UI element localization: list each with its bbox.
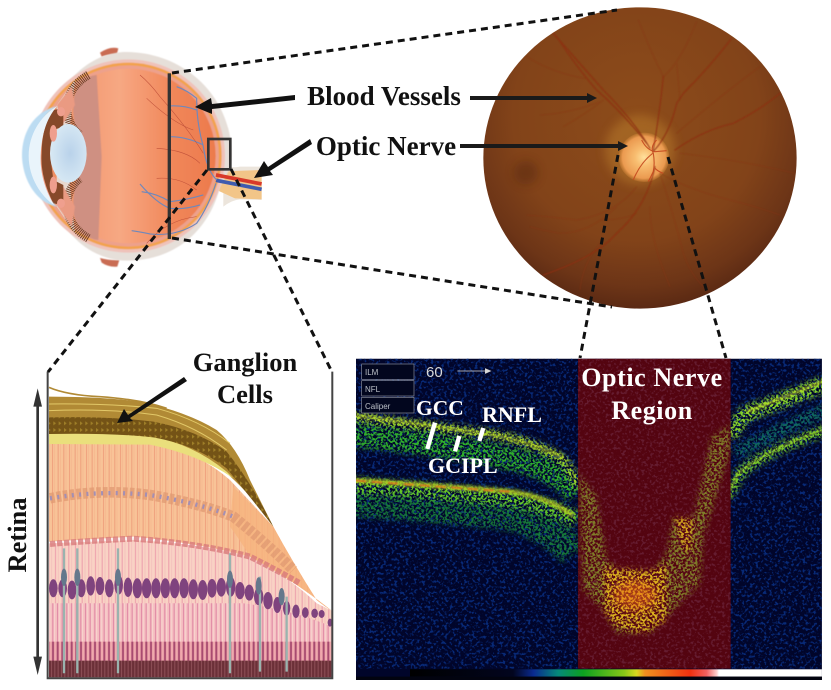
fundus photograph: [483, 7, 797, 309]
button labels: Caliper: [365, 402, 391, 411]
sclera: [53, 52, 232, 261]
scale bar: [410, 669, 822, 677]
scale arrow: [457, 369, 491, 373]
RPE green: [350, 485, 577, 520]
label: GCIPL: GCIPL: [428, 453, 498, 478]
pointer arrows: [117, 93, 628, 423]
cilliary fibres: [67, 75, 88, 238]
arrow to fundus blood vessels: [470, 93, 597, 103]
macula: [514, 161, 538, 185]
retina cross-section panel: [33, 372, 332, 678]
magnification box: [208, 139, 230, 169]
optic nerve core: [217, 170, 262, 199]
background speckle: [356, 359, 822, 669]
main vessels: [543, 33, 780, 275]
fundus disc: [483, 7, 797, 309]
label: ganglion cells: Cells: [217, 379, 273, 409]
retina height arrow: [33, 388, 42, 675]
white gap in front of vitreous: [57, 80, 75, 233]
optic disc glow: [605, 115, 675, 185]
aqueous chamber: [29, 106, 57, 205]
lower pink layer: [49, 603, 332, 677]
scan legend tick marks: [427, 423, 483, 451]
label: 60: 60: [426, 364, 443, 381]
OCT scan panel: [350, 359, 827, 680]
optic cup hot core: [613, 580, 657, 610]
right upper band: [731, 383, 827, 437]
peach bipolar layer: [49, 440, 332, 611]
ganglion fibre layer: [49, 397, 273, 527]
button labels: ILM: [365, 368, 379, 377]
right haze: [737, 410, 827, 453]
optic nerve sheath: [223, 165, 262, 207]
dark ganglion cells: [49, 417, 273, 527]
inner nuclear band: [50, 492, 293, 570]
arteries: [140, 75, 203, 243]
right lower band: [725, 430, 827, 498]
blue dots in nuclear band: [50, 493, 233, 517]
outer nuclear band: [50, 539, 300, 583]
eye muscles: [100, 48, 119, 267]
nerve fibre layer: [350, 416, 578, 487]
bands: [350, 383, 827, 553]
arrow to ganglion cells: [117, 377, 187, 423]
grey rod cells: [64, 548, 287, 673]
optic nerve vessels: [216, 175, 262, 189]
label: GCC: GCC: [416, 396, 464, 420]
bright retinal layers: [350, 380, 827, 516]
optic disc: [619, 133, 669, 182]
cropping bar: [168, 73, 171, 239]
pink photoreceptor layer: [49, 540, 332, 677]
stray fibre: [49, 387, 167, 408]
veins: [132, 87, 217, 234]
iris folds: [50, 107, 65, 208]
lower retinal haze: [350, 502, 573, 553]
iris: [41, 108, 63, 205]
lens: [50, 124, 87, 183]
optic cup tissue: [579, 425, 730, 633]
eye cross-section illustration: [22, 48, 262, 267]
optic nerve region overlay: [578, 359, 731, 669]
cornea: [22, 106, 57, 207]
purple nuclei band: [49, 575, 332, 627]
vitreous edge and lens capsule: [73, 75, 102, 240]
fundus details: [514, 20, 795, 290]
bottom black strip: [356, 677, 822, 680]
brown pigment layer: [49, 661, 332, 677]
arrow to optic disc: [460, 141, 628, 151]
retina layers: [32, 59, 225, 253]
light fibres: [49, 404, 230, 450]
label: blood vessels: Blood Vessels: [307, 81, 461, 111]
label: optic nerve: Optic Nerve: [316, 131, 456, 161]
dashed connectors: [48, 10, 726, 372]
button labels: NFL: [365, 385, 381, 394]
disc vessels: [633, 140, 667, 182]
scan background: [356, 359, 822, 680]
arrow to eye blood vessels: [195, 95, 295, 114]
maroon outer segments: [49, 642, 332, 662]
cilliary body: [57, 87, 75, 227]
label: optic nerve region: Region: [611, 396, 693, 425]
peach shading: [230, 487, 332, 611]
software buttons: [362, 364, 414, 413]
label: ganglion cells: Ganglion: [193, 347, 298, 377]
grey rod bodies: [61, 569, 285, 605]
label: RNFL: RNFL: [482, 402, 542, 427]
label: optic nerve region: Optic Nerve: [581, 363, 723, 392]
yellow ganglion strip: [49, 432, 233, 478]
ganglion layer: [350, 435, 577, 493]
label: retina: Retina: [2, 497, 32, 573]
panel frame: [48, 372, 332, 678]
arrow to eye optic nerve: [254, 139, 312, 178]
secondary vessels: [580, 173, 702, 288]
overlay speckle: [578, 359, 731, 669]
